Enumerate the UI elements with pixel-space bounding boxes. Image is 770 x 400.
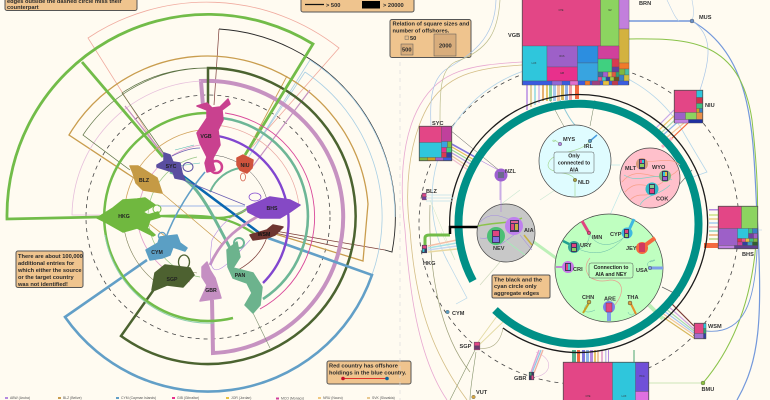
circle: pink group: MLT (625, 166, 637, 172)
salmon arc SYC to NIU (88, 2, 339, 157)
PAN edge bundle (572, 350, 635, 362)
colour legend: SVK (Slovakia) (372, 396, 395, 400)
small treemap BLZ (422, 193, 426, 200)
VGB edge bundle (526, 85, 579, 110)
black connector to gray circle (450, 227, 478, 234)
circle: connection to AIA and NEV: USA (636, 268, 648, 274)
circle: connection to AIA and NEV: ARE (604, 296, 616, 302)
treemap VGB: NZ (608, 9, 612, 12)
country labels: VUT (476, 390, 488, 396)
country labels: MUS (699, 15, 712, 21)
colour legend: NRU (Nauru) (323, 396, 343, 400)
country shape SGP (152, 265, 194, 290)
country shape CYM (146, 235, 187, 260)
self loops (210, 161, 222, 173)
country shape HKG (97, 198, 160, 236)
country shape WSM: WSM (258, 232, 270, 238)
country shape SGP: SGP (167, 277, 178, 283)
black aggregate circle (450, 95, 708, 353)
country labels (423, 1, 754, 396)
WSM edge bundle (649, 287, 694, 338)
note: unidentified entries: which either the source (17, 268, 82, 274)
country labels: SGP (460, 344, 472, 350)
tan arc BLZ (69, 56, 368, 261)
treemap BHS (718, 206, 758, 249)
legend: edge width (301, 0, 414, 12)
country labels: BMU (702, 387, 714, 393)
green thick arc HKG (7, 14, 313, 219)
note: red and blue country legend: Red country has offshore (329, 364, 398, 370)
SYC edge bundle (452, 144, 477, 170)
cyan aggregate ring (458, 104, 698, 344)
circle: connection to AIA and NEV: AIA and NEY (595, 272, 627, 278)
inner arcs (104, 113, 233, 321)
country shape NIU (237, 155, 253, 173)
circle: connection to AIA and NEV: THA (627, 295, 638, 301)
black arc VGB to WSM (219, 29, 395, 252)
country labels: BHS (742, 252, 754, 258)
circle: connection to AIA and NEV: JEY (626, 246, 637, 252)
treemap VGB (522, 0, 629, 85)
note: black and cyan circle: cyan circle only (494, 284, 538, 290)
circle: gray AIA and NEV (477, 204, 535, 262)
note: black and cyan circle: aggregate edges (494, 291, 539, 297)
colour legend (5, 396, 395, 400)
circle: connection to AIA and NEV: URY (580, 243, 592, 249)
small treemap SGP (474, 342, 480, 350)
legend: square sizes: number of offshores. (392, 28, 450, 34)
circle: only connected to AIA: AIA (570, 168, 579, 174)
country labels: BLZ (426, 189, 437, 195)
circle: connection to AIA and NEV (555, 214, 663, 322)
note: black and cyan circle: The black and the (494, 278, 542, 284)
treemap SYC (419, 126, 452, 161)
note: dashed circle edges (5, 0, 137, 11)
country shape WSM (250, 225, 283, 240)
circle: only connected to AIA: Only (568, 154, 580, 160)
legend: square sizes: 2000 (439, 44, 452, 50)
right network diagram (402, 0, 762, 400)
circle: connection to AIA and NEV: IMN (592, 235, 602, 241)
dark red radial lines (214, 29, 385, 250)
country shape HKG: HKG (118, 214, 130, 220)
colour legend: CYM (Cayman Islands) (121, 396, 156, 400)
thick blue arc CYM (65, 238, 372, 392)
country labels: NIU (705, 103, 715, 109)
country shape BHS (247, 197, 300, 218)
circle: only connected to AIA: connected to (558, 160, 590, 166)
circle: pink group: COK (656, 196, 668, 202)
treemap PAN: CHE (585, 395, 591, 398)
circle: only connected to AIA: IRL (584, 144, 594, 150)
treemap PAN: LUX (622, 395, 627, 398)
mauve arc GBR (201, 81, 343, 353)
note: red and blue country legend (327, 361, 411, 384)
NIU edge bundle (656, 110, 688, 141)
treemap VGB: LUX (532, 62, 537, 65)
circle: only connected to AIA: NLD (578, 180, 590, 186)
dashed outer circle (419, 64, 739, 384)
BLZ edge bundle (426, 195, 455, 201)
country labels: VGB (508, 33, 520, 39)
circle: connection to AIA and NEV: CHN (582, 295, 594, 301)
small treemap HKG (422, 245, 427, 253)
vertical divider (399, 62, 401, 400)
node NZL (494, 168, 508, 212)
note: unidentified entries: was not identified! (17, 282, 68, 288)
circle: only connected to AIA (539, 125, 611, 197)
interior flows (160, 209, 255, 234)
circle: connection to AIA and NEV: CRI (573, 267, 583, 273)
legend: square sizes: 500 (402, 48, 412, 54)
small treemap GBR (529, 372, 534, 380)
country labels: BRN (639, 1, 651, 7)
country labels: CYM (452, 311, 465, 317)
note: black and cyan circle (492, 275, 550, 298)
country shape SYC: SYC (166, 164, 177, 170)
circle: connection to AIA and NEV: CYP (610, 232, 622, 238)
treemap VGB: GIB (560, 72, 564, 75)
legend: edge width: > 20000 (383, 3, 404, 9)
note: unidentified entries: or the target country (18, 275, 74, 281)
country shape BLZ (130, 166, 162, 193)
HKG edge bundle (425, 235, 457, 252)
circle: pink group (620, 148, 680, 208)
legend: square sizes (390, 20, 471, 58)
country shape VGB (197, 99, 230, 172)
colour legend: JOR (Jordan) (231, 396, 251, 400)
circle: gray AIA and NEV: NEV (493, 246, 505, 252)
country shape CYM: CYM (151, 250, 163, 256)
left radial diagram (7, 2, 395, 392)
note: dashed circle edges: counterpart (7, 5, 39, 11)
dark green arc SGP (121, 68, 356, 364)
circle: pink group: WYO (652, 165, 666, 171)
note: unidentified entries (16, 251, 83, 288)
BHS edge bundle (704, 209, 718, 248)
country labels: WSM (708, 324, 722, 330)
country shape NIU: NIU (241, 163, 250, 169)
light blue arcs (248, 60, 395, 275)
colour legend: GIB (Gibraltar) (177, 396, 199, 400)
legend: edge width: > 500 (326, 3, 340, 9)
note: unidentified entries: additional entries for (18, 261, 75, 267)
treemap VGB: CHE (558, 9, 564, 12)
colour legend: BLZ (Belize) (63, 396, 82, 400)
dashed reference circle (86, 95, 330, 339)
country labels: GBR (514, 376, 526, 382)
country shape BLZ: BLZ (139, 178, 150, 184)
country shape PAN (227, 242, 262, 313)
country shape SYC (157, 153, 185, 180)
treemap WSM (694, 323, 706, 339)
circle: connection to AIA and NEV: Connection to (594, 265, 628, 271)
country labels: SYC (432, 121, 444, 127)
small nodes (446, 19, 705, 399)
treemap PAN: HKG (639, 375, 645, 378)
country shape GBR: GBR (205, 288, 217, 294)
country shape VGB: VGB (200, 134, 212, 140)
GBR edge bundle (531, 350, 543, 373)
circle: gray AIA and NEV: AIA (524, 228, 534, 234)
country labels: HKG (423, 261, 435, 267)
country labels: NZL (505, 169, 516, 175)
treemap NIU (674, 90, 703, 123)
country shape BHS: BHS (267, 206, 278, 212)
treemap VGB: RUS (559, 55, 565, 58)
legend: square sizes: Relation of square sizes and (392, 22, 470, 28)
note: unidentified entries: There are about 100,000 (18, 254, 83, 260)
legend: square sizes: 50 (410, 36, 416, 42)
circle: only connected to AIA: MYS (563, 137, 575, 143)
long curved edges (402, 0, 762, 400)
colour legend: ABW (Aruba) (10, 396, 30, 400)
light edges to inner circles (480, 100, 692, 285)
country shape GBR (200, 262, 221, 301)
country shape PAN: PAN (235, 273, 246, 279)
note: red and blue country legend: holdings in the blue country. (329, 370, 407, 376)
treemap PAN (563, 362, 649, 400)
